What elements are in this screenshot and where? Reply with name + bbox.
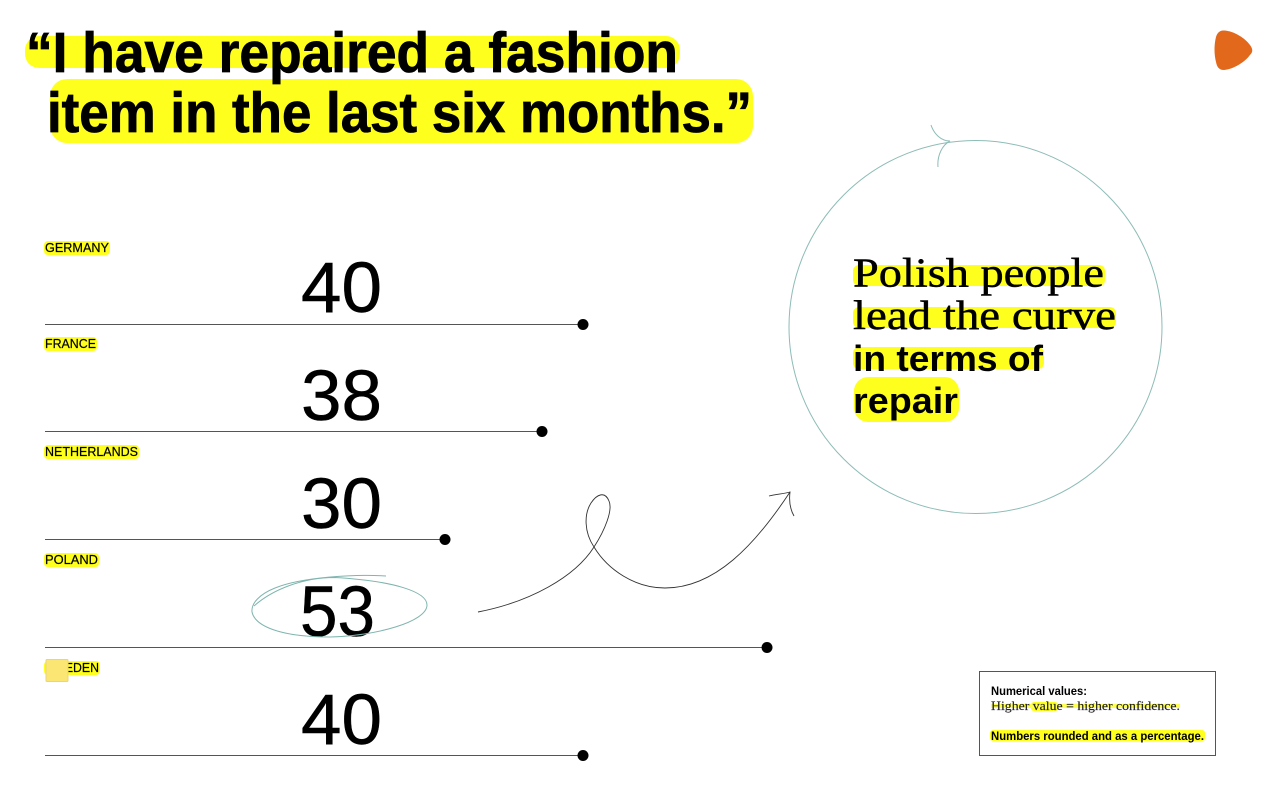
- title: “I have repaired a fashion: [26, 21, 678, 85]
- chart: Sweden row: 40: [301, 681, 382, 760]
- callout text: in terms of: [853, 338, 1044, 379]
- chart: Poland row: [44, 552, 772, 653]
- legend note box: Higher value = higher confidence.: [991, 698, 1180, 713]
- chart: Poland row: 53: [300, 573, 375, 652]
- legend note box: [980, 672, 1216, 756]
- chart: Germany row: 40: [301, 249, 382, 328]
- chart: Sweden row: [44, 660, 588, 761]
- legend note box: Numerical values:: [991, 684, 1087, 698]
- legend note box: Numbers rounded and as a percentage.: [991, 729, 1204, 743]
- callout text: repair: [853, 380, 958, 421]
- chart: Sweden row: SWEDEN: [45, 660, 99, 675]
- chart: Poland row: POLAND: [45, 552, 98, 567]
- title: [25, 21, 753, 145]
- arrow: curved arrow to callout: [478, 492, 794, 612]
- icon: orange logo: [1214, 30, 1252, 70]
- chart: Netherlands row: [44, 444, 450, 545]
- chart: France row: 38: [301, 357, 382, 436]
- callout text: [853, 250, 1116, 422]
- title: item in the last six months.”: [47, 81, 752, 145]
- callout text: Polish people: [853, 250, 1104, 296]
- chart: Germany row: [44, 240, 588, 330]
- chart: Netherlands row: 30: [301, 465, 382, 544]
- chart: Germany row: GERMANY: [45, 240, 109, 255]
- chart: France row: [44, 336, 548, 437]
- sticky note: [46, 660, 68, 682]
- hand-drawn ellipse around 53: [252, 575, 427, 637]
- callout circle: [789, 125, 1162, 514]
- callout text: lead the curve: [853, 292, 1116, 338]
- chart: France row: FRANCE: [45, 336, 96, 351]
- chart: Netherlands row: NETHERLANDS: [45, 444, 138, 459]
